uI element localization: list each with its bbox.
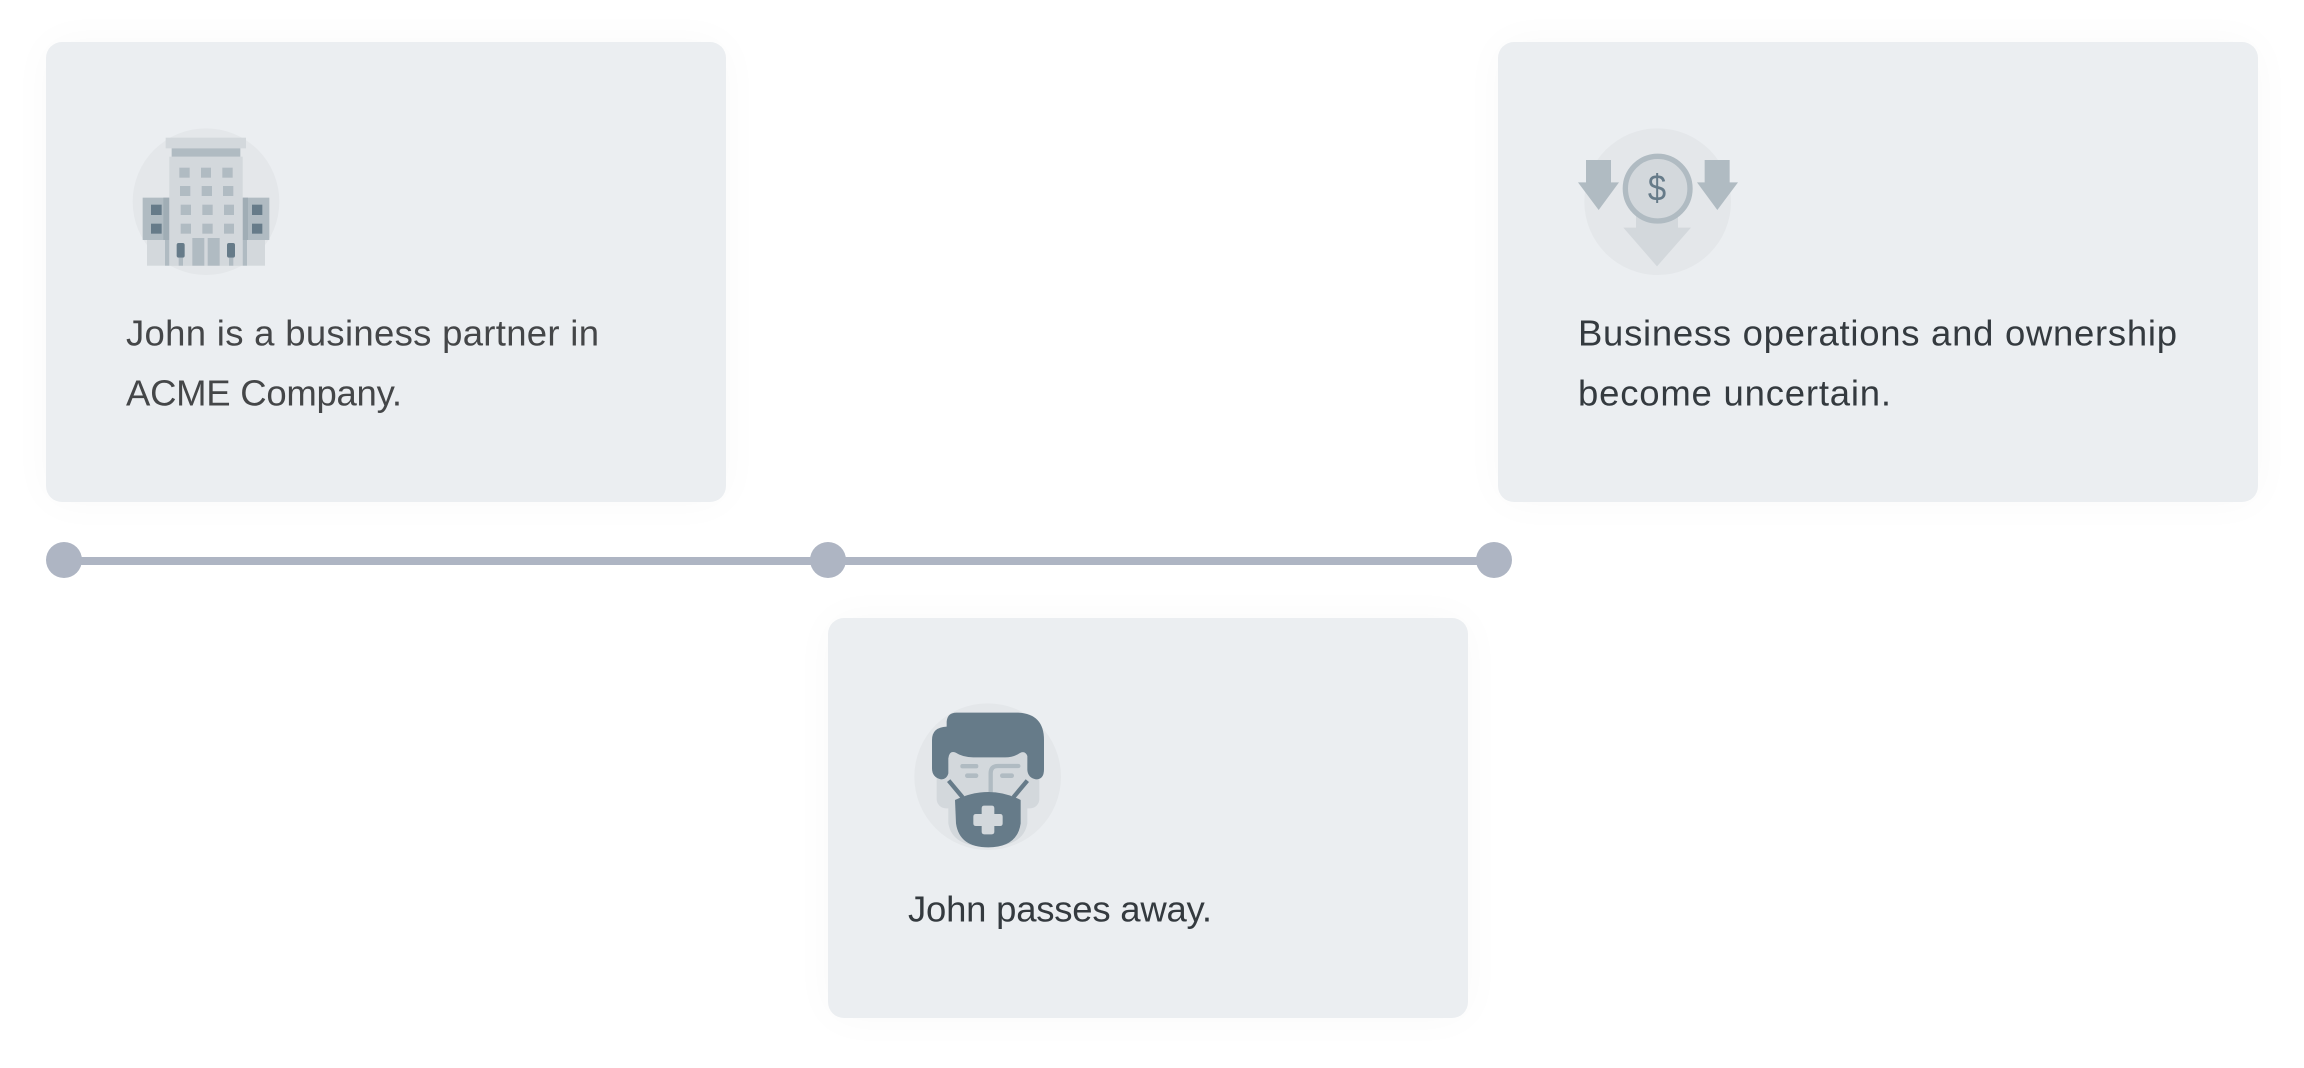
text: Business operations and ownership become uncertain: Business operations and ownership [1578,312,2177,354]
icon: dollar coin with falling arrows: $ [1648,167,1666,209]
text: John is a business partner in ACME Company [126,312,599,414]
panel: John passes away [828,618,1468,1018]
icon: office building [142,138,270,266]
text: John passes away: John passes away. [908,888,1212,930]
icon: dollar coin with falling arrows [1578,154,1738,266]
panel: John is a business partner [46,42,726,502]
text: John is a business partner in ACME Company: John is a business partner in [126,312,599,354]
text: John is a business partner in ACME Company: ACME Company. [126,372,402,414]
panel: business uncertainty [1498,42,2258,502]
timeline with three nodes [46,542,1512,578]
text: Business operations and ownership become uncertain: become uncertain. [1578,372,1891,414]
text: Business operations and ownership become uncertain [1578,312,2177,414]
icon: man wearing medical mask [932,712,1044,848]
